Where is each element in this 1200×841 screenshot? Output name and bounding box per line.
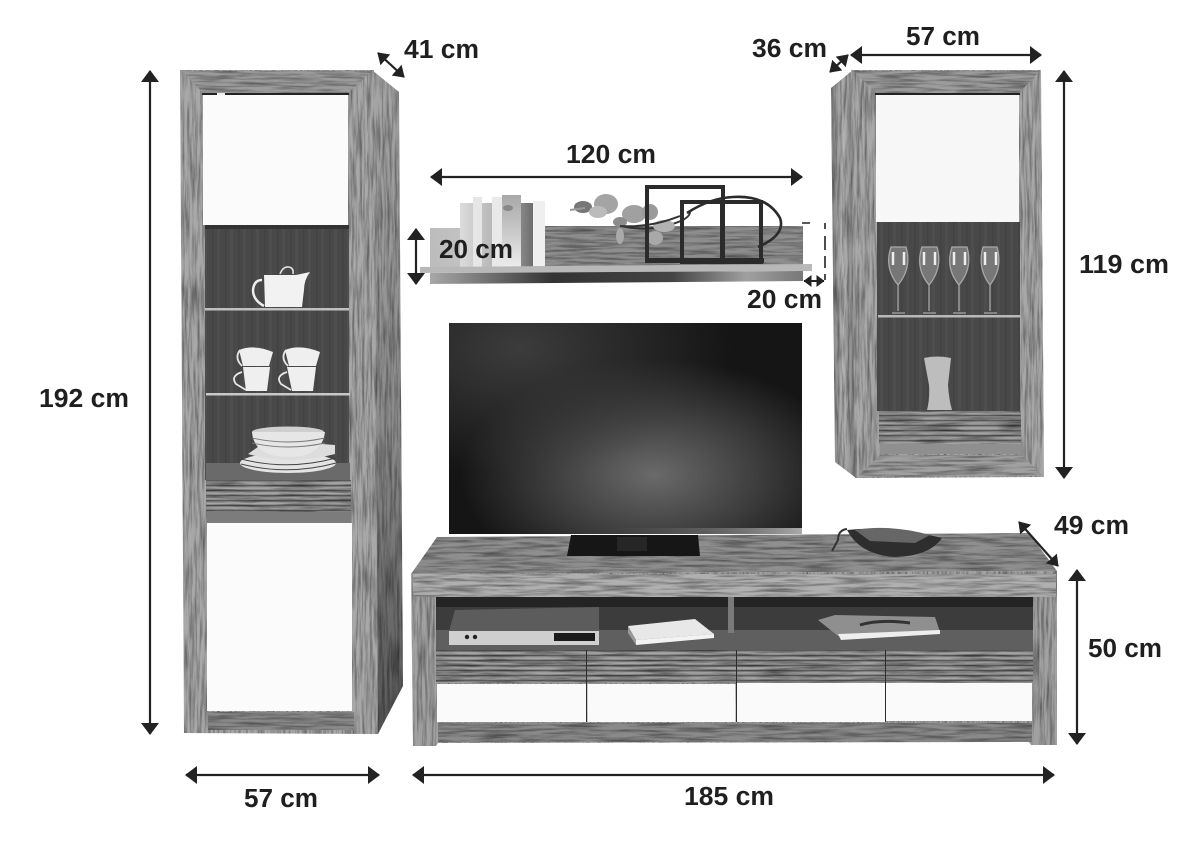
white drawer fronts xyxy=(437,650,1032,722)
wine glass 3 xyxy=(950,247,969,313)
icon: magazines xyxy=(818,615,940,640)
label: 36 cm: 36 cm xyxy=(752,35,827,63)
icon: book xyxy=(628,619,714,645)
dimension arrow: wall cabinet height 119 cm xyxy=(1063,71,1065,478)
icon: decorative bowl xyxy=(832,528,942,557)
dimension arrow: shelf width 120 cm xyxy=(431,176,802,178)
label: 192 cm: 192 cm xyxy=(39,385,129,413)
dashed depth guide xyxy=(802,223,825,280)
open compartments xyxy=(436,597,1033,651)
dimension arrow: lowboard depth 49 cm xyxy=(1019,522,1058,566)
dimension arrow: shelf height 20 cm xyxy=(415,229,417,284)
shelf ledge xyxy=(420,264,812,273)
label: 41 cm: 41 cm xyxy=(404,36,479,64)
wall cabinet white door xyxy=(875,93,1020,222)
glass shelf lower xyxy=(206,393,350,396)
wine glass 4 xyxy=(981,247,999,313)
shelf back panel xyxy=(544,226,803,267)
dimension arrow: height 192 cm xyxy=(149,71,151,734)
icon: DVD player xyxy=(449,607,599,645)
label: 185 cm: 185 cm xyxy=(684,783,774,811)
label: 49 cm: 49 cm xyxy=(1054,512,1129,540)
wall cabinet ribbed panel xyxy=(879,411,1021,444)
TV stand xyxy=(567,535,700,556)
icon: metal frames xyxy=(646,187,781,263)
lower white door xyxy=(207,523,352,711)
plinth rail xyxy=(208,712,354,730)
ribbed drawer fronts xyxy=(436,650,1033,683)
icon: orchid branch xyxy=(570,194,690,245)
tall display cabinet xyxy=(180,70,403,734)
label: shelf height 20 cm: 20 cm xyxy=(439,236,513,264)
glass compartment interior xyxy=(205,225,350,480)
label: shelf depth 20 cm: 20 cm xyxy=(747,286,822,314)
lowboard front carcass xyxy=(411,571,1057,746)
lowboard plinth xyxy=(438,723,1032,742)
label: 120 cm: 120 cm xyxy=(566,141,656,169)
upper white door xyxy=(202,93,349,225)
lowboard top band xyxy=(413,574,1056,597)
dimension arrow: wall cabinet depth 36 cm xyxy=(830,55,848,72)
wine glass 2 xyxy=(920,247,939,313)
dimension arrow: depth 41 cm xyxy=(378,53,404,77)
cabinet side panel xyxy=(372,70,403,734)
wall display cabinet xyxy=(831,70,1044,478)
dimension arrow: width 57 cm tall cabinet xyxy=(186,774,379,776)
lowboard top surface xyxy=(411,533,1057,574)
icon: stacked cups xyxy=(234,347,320,391)
label: 57 cm tall cabinet: 57 cm xyxy=(244,785,318,813)
glass shelf upper xyxy=(205,308,349,310)
label: wall cabinet 57 cm: 57 cm xyxy=(906,23,980,51)
ribbed drawer front xyxy=(206,480,351,512)
TV lowboard xyxy=(411,528,1057,746)
wall shelf xyxy=(420,187,825,284)
dimension arrow: wall cabinet width 57 cm xyxy=(851,54,1041,56)
label: 119 cm: 119 cm xyxy=(1079,251,1169,279)
wall cabinet glass shelf xyxy=(878,315,1020,318)
dimension arrow: lowboard width 185 cm xyxy=(413,774,1054,776)
TV screen xyxy=(449,323,802,534)
compartment divider xyxy=(728,597,734,633)
dimension arrow: shelf depth 20 cm xyxy=(804,280,824,282)
icon: teapot jug xyxy=(253,267,310,307)
icon: wine glasses xyxy=(889,247,999,313)
wall cabinet front frame xyxy=(851,70,1044,478)
label: 50 cm: 50 cm xyxy=(1088,635,1162,663)
wall cabinet side xyxy=(831,70,856,478)
icon: vase xyxy=(924,356,952,410)
icon: stacked plates xyxy=(240,426,336,473)
wine glass 1 xyxy=(889,247,908,313)
dimension arrow: lowboard height 50 cm xyxy=(1076,570,1078,744)
icon: books xyxy=(460,195,545,267)
wall cabinet interior xyxy=(877,222,1020,411)
cabinet front frame xyxy=(180,70,378,734)
television xyxy=(449,323,802,534)
